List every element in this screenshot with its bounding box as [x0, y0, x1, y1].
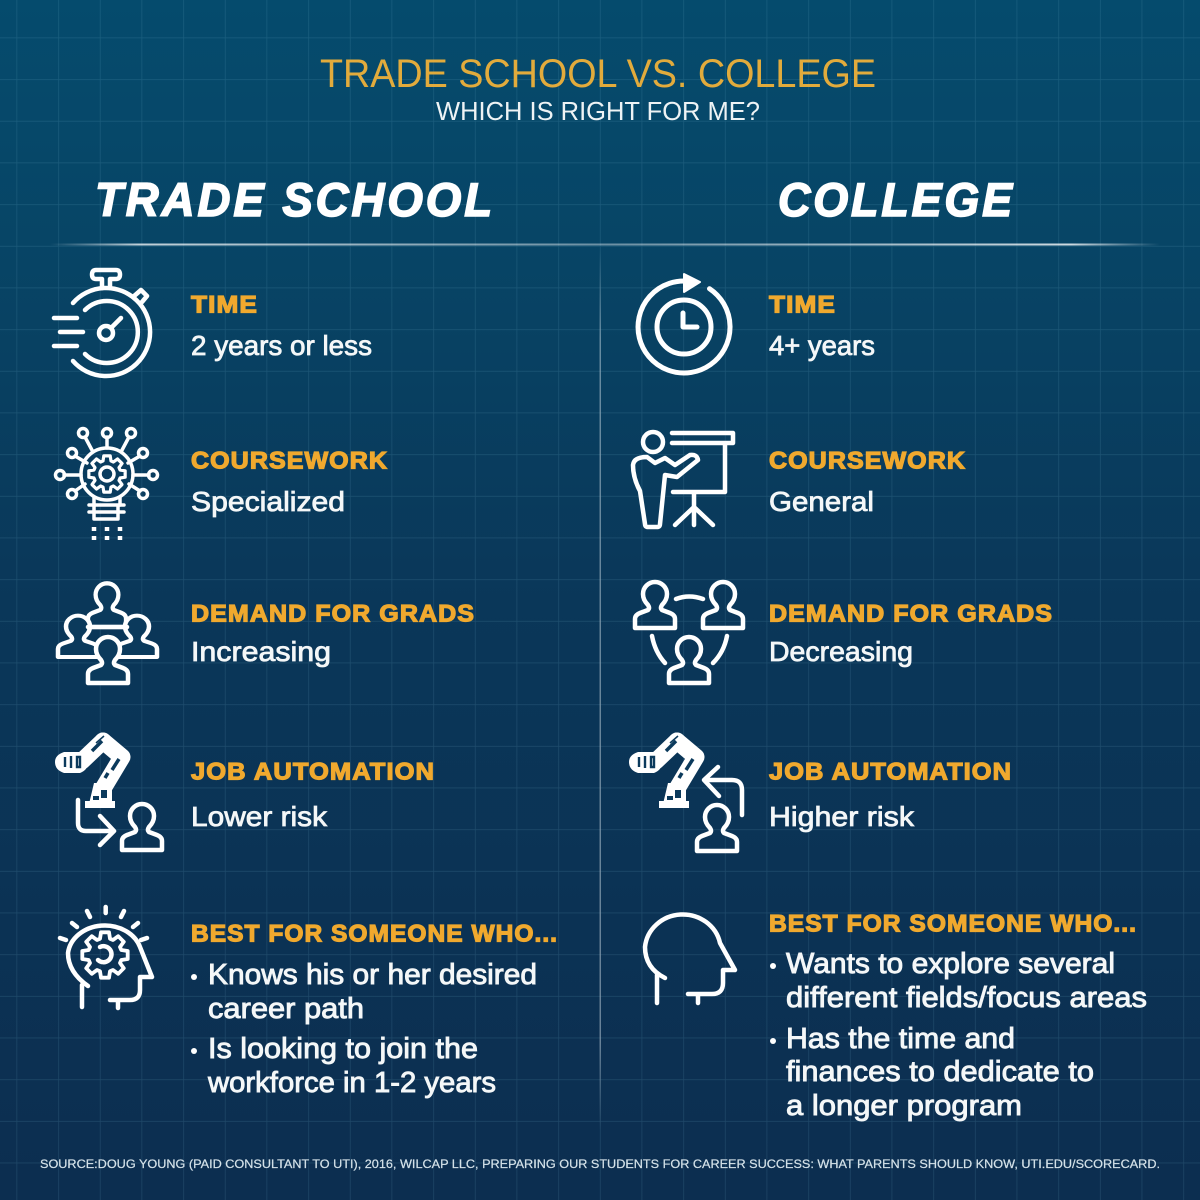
label: COURSEWORK — [191, 448, 388, 474]
bullets: career path — [208, 993, 364, 1025]
icon: lightbulb gear — [56, 428, 158, 540]
bullets — [770, 948, 1147, 1122]
source note: SOURCE:DOUG YOUNG (PAID CONSULTANT TO UTI), 2016, WILCAP LLC, PREPARING OUR STUDENTS FOR CAREER SUCCESS: WHAT PARENTS SHOULD KNOW, UTI.EDU/SCORECARD. — [40, 1158, 1160, 1171]
value: Increasing — [191, 636, 331, 667]
label: JOB AUTOMATION — [769, 758, 1012, 786]
label: JOB AUTOMATION — [191, 758, 435, 786]
title: TRADE SCHOOL VS. COLLEGE — [320, 52, 876, 96]
horizontal rule — [50, 244, 1160, 246]
icon: robot arm to person — [55, 736, 162, 850]
value: 2 years or less — [191, 330, 372, 361]
subtitle: WHICH IS RIGHT FOR ME? — [436, 96, 760, 126]
label: BEST FOR SOMEONE WHO... — [769, 910, 1137, 938]
panel: college automation — [629, 736, 1012, 851]
bullets: Is looking to join the — [208, 1033, 478, 1065]
icon: stopwatch — [54, 270, 150, 376]
value: Lower risk — [191, 801, 328, 832]
panel: trade school coursework — [56, 428, 388, 540]
panel: trade school demand — [58, 583, 475, 683]
panel: trade school time — [54, 270, 372, 376]
bullets: different fields/focus areas — [786, 982, 1147, 1014]
column divider — [600, 250, 601, 1130]
bullets: a longer program — [786, 1090, 1022, 1122]
panel: college best for — [645, 910, 1147, 1122]
bullets: Has the time and — [786, 1023, 1015, 1055]
icon: clock with arrow — [638, 274, 730, 373]
panel: college coursework — [633, 432, 966, 527]
label: TIME — [769, 292, 836, 318]
heading: trade school: TRADE SCHOOL — [95, 173, 495, 226]
icon: head outline — [645, 914, 735, 1003]
label: BEST FOR SOMEONE WHO... — [191, 920, 558, 948]
value: 4+ years — [769, 330, 875, 361]
icon: group of people — [58, 583, 157, 683]
value: Decreasing — [769, 636, 913, 667]
value: Specialized — [191, 486, 345, 517]
bullets: Knows his or her desired — [208, 959, 537, 991]
bullets — [191, 959, 537, 1099]
panel: college demand — [635, 582, 1053, 683]
label: COURSEWORK — [769, 448, 966, 474]
panel: trade school best for — [60, 907, 558, 1099]
bullets: finances to dedicate to — [786, 1056, 1094, 1088]
panel: college time — [638, 274, 875, 373]
bullets: workforce in 1-2 years — [207, 1067, 496, 1099]
label: DEMAND FOR GRADS — [769, 600, 1053, 628]
icon: person to robot arm — [629, 736, 742, 851]
bullets: Wants to explore several — [786, 948, 1115, 980]
icon: people in a circle — [635, 582, 743, 683]
value: Higher risk — [769, 801, 915, 832]
icon: head with gear — [60, 907, 152, 1008]
heading: college: COLLEGE — [778, 173, 1015, 226]
panel: trade school automation — [55, 736, 435, 850]
label: TIME — [191, 292, 258, 318]
label: DEMAND FOR GRADS — [191, 600, 475, 628]
icon: presenter at board — [633, 432, 733, 527]
value: General — [769, 486, 874, 517]
